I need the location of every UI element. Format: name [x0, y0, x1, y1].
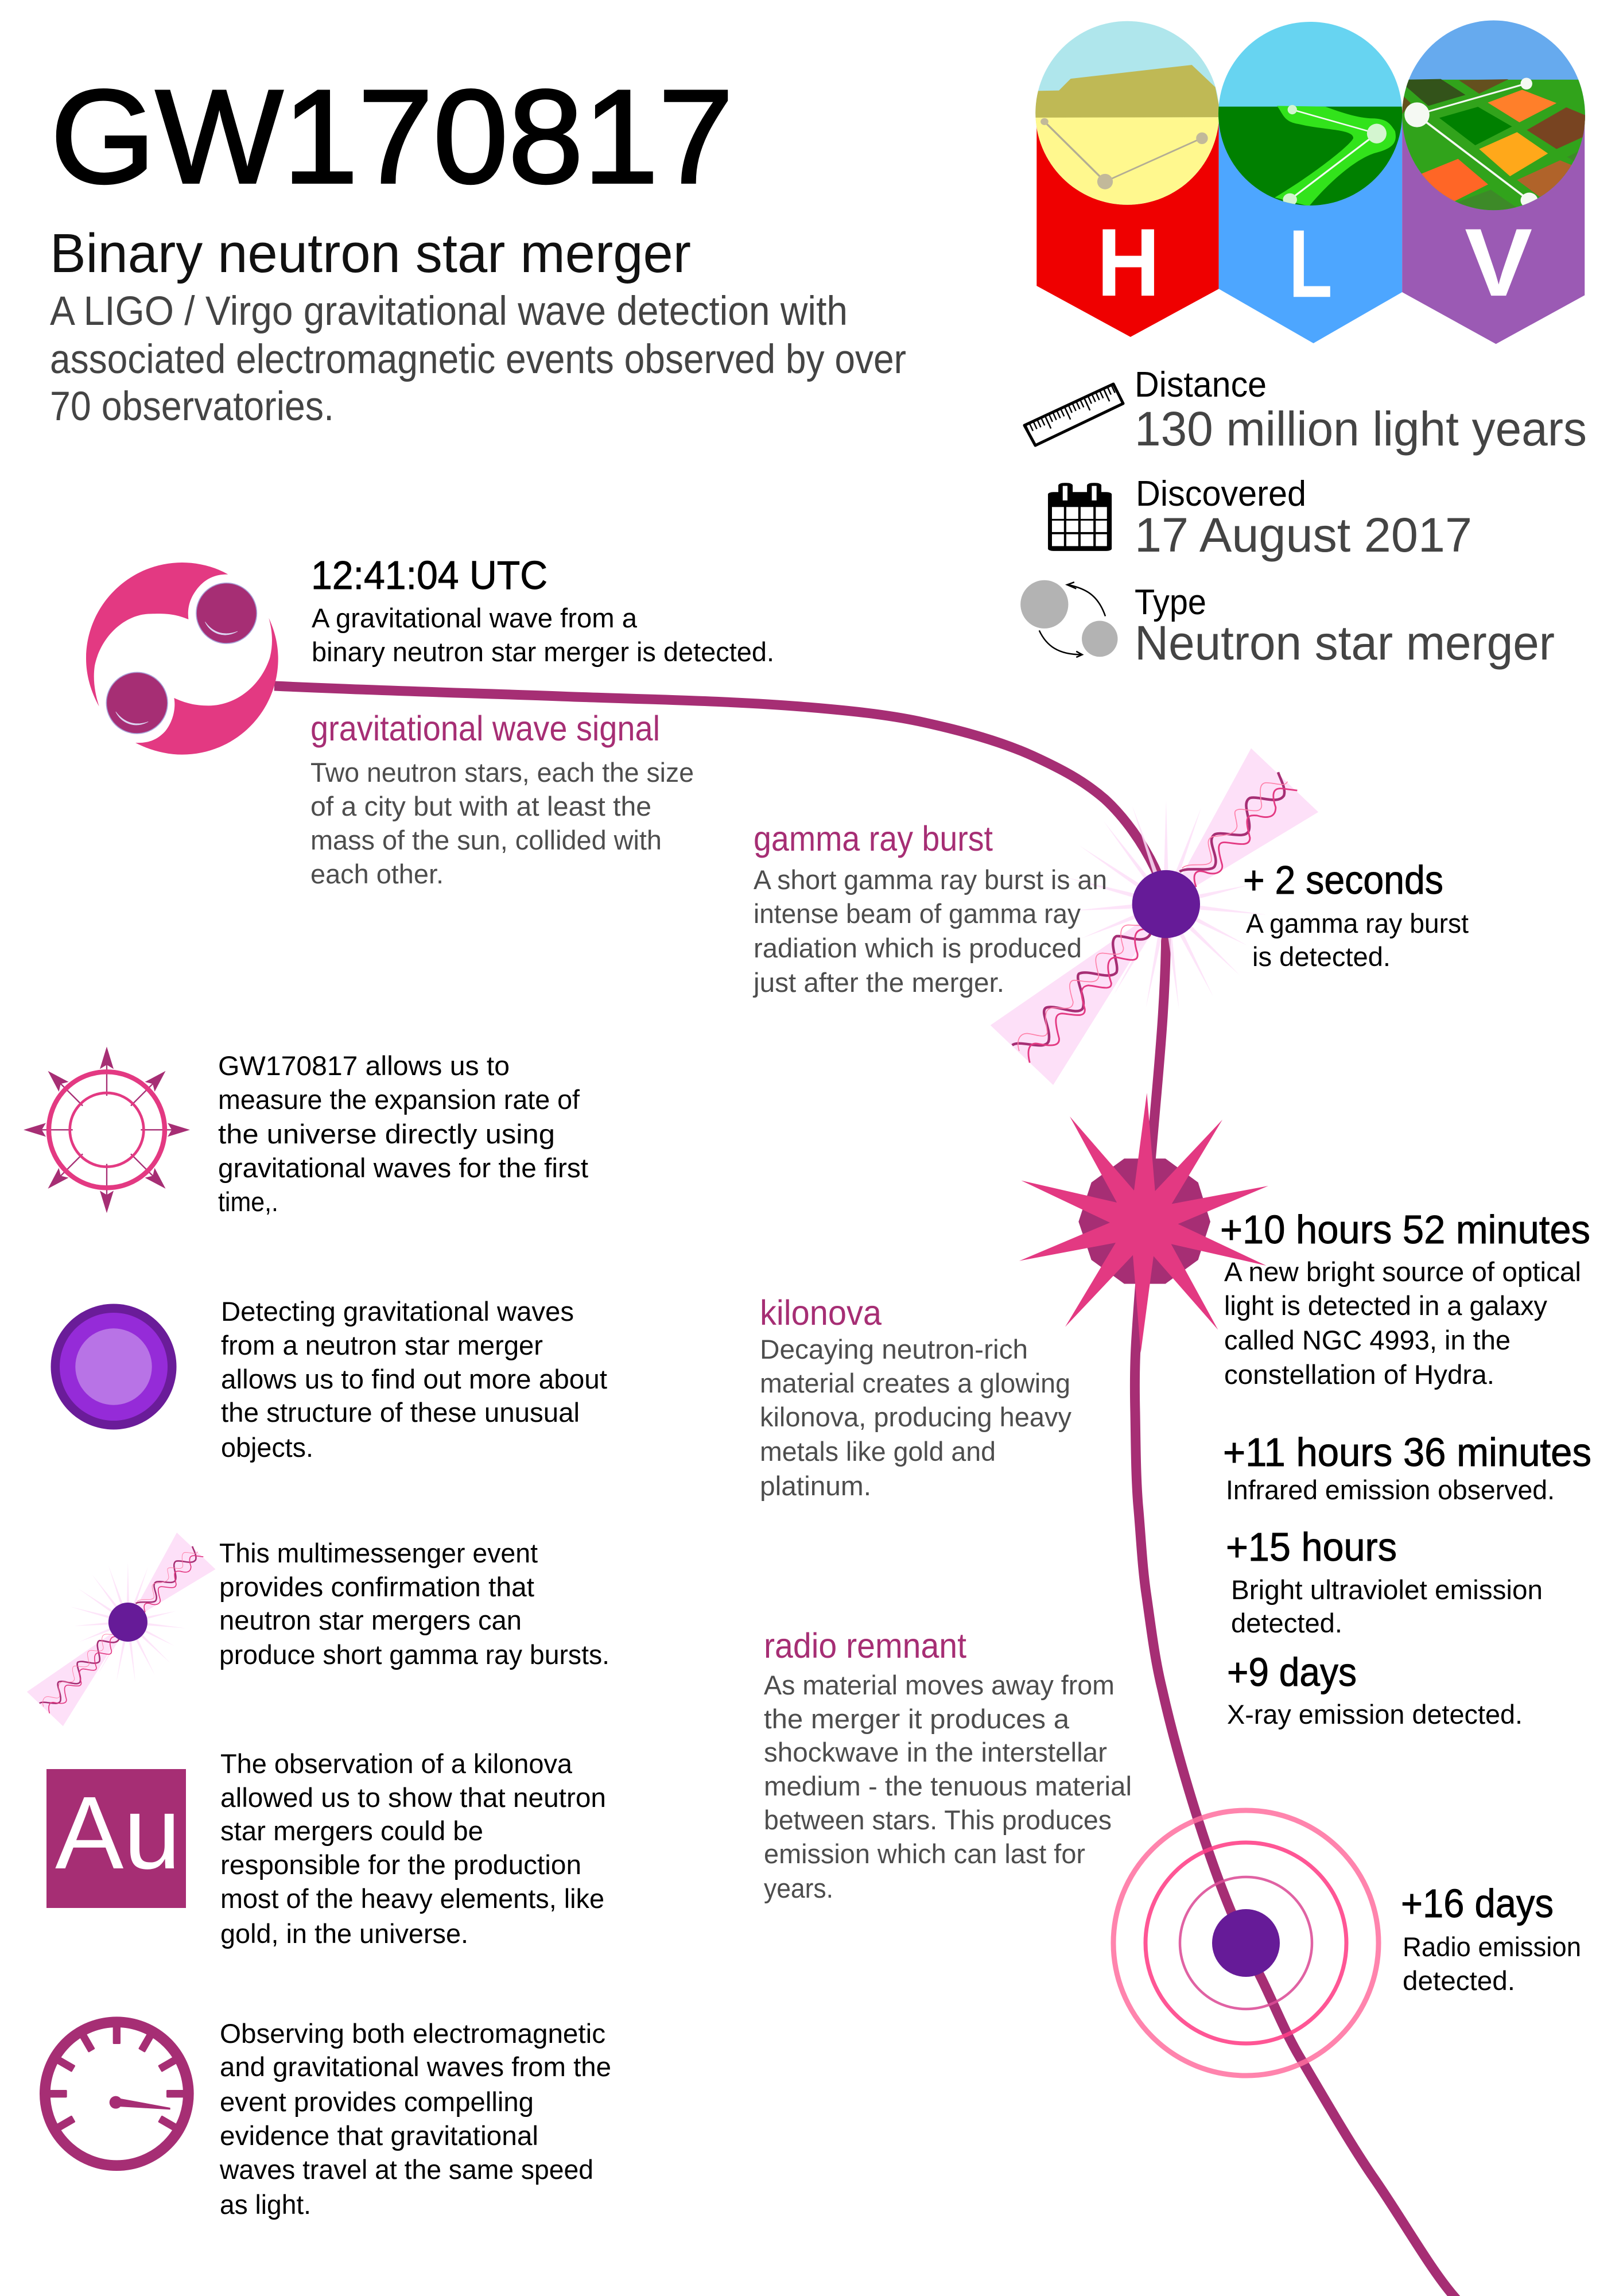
heavy elements text: gold, in the universe.: [220, 1918, 468, 1949]
expansion rate text: measure the expansion rate of: [218, 1084, 580, 1115]
kilonova explanation: [760, 1293, 1071, 1501]
expansion rate text: the universe directly using: [218, 1119, 555, 1149]
+2 seconds text: is detected.: [1252, 941, 1391, 972]
+10 hours text: A new bright source of optical: [1224, 1256, 1581, 1287]
radio remnant explanation: emission which can last for: [764, 1839, 1085, 1869]
kilonova explanation: material creates a glowing: [760, 1368, 1070, 1398]
speed of gravity text: evidence that gravitational: [220, 2120, 538, 2151]
kilonova explanation: Decaying neutron-rich: [760, 1334, 1028, 1364]
distance text: [1135, 365, 1587, 456]
multimessenger text: produce short gamma ray bursts.: [219, 1639, 609, 1670]
+9 days text: X-ray emission detected.: [1227, 1699, 1523, 1729]
speed of gravity text: [219, 2018, 611, 2220]
multimessenger text: provides confirmation that: [219, 1572, 534, 1602]
+11 hours text: +11 hours 36 minutes: [1223, 1430, 1591, 1475]
badge: Virgo: [1401, 19, 1589, 344]
kilonova explanation: metals like gold and: [760, 1436, 996, 1467]
intro text: [50, 289, 906, 429]
icon: speedometer: [45, 2022, 188, 2166]
heavy elements text: allowed us to show that neutron: [220, 1782, 606, 1813]
gravitational wave signal explanation: [310, 709, 694, 889]
title: GW170817: [51, 63, 733, 211]
expansion rate text: gravitational waves for the first: [218, 1153, 588, 1183]
icon: orbiting stars: [1020, 580, 1118, 657]
gamma ray burst explanation: intense beam of gamma ray: [754, 898, 1081, 929]
+10 hours text: called NGC 4993, in the: [1224, 1325, 1511, 1355]
radio remnant explanation: years.: [764, 1873, 833, 1903]
heavy elements text: The observation of a kilonova: [220, 1748, 573, 1779]
gamma ray burst explanation: A short gamma ray burst is an: [754, 864, 1107, 895]
neutron star structure text: objects.: [221, 1432, 313, 1463]
badge: Hanford: [1034, 19, 1221, 337]
+15 hours text: detected.: [1231, 1608, 1342, 1638]
gamma ray burst explanation: just after the merger.: [752, 967, 1004, 998]
discovered text: 17 August 2017: [1135, 508, 1472, 562]
neutron star structure text: Detecting gravitational waves: [221, 1296, 574, 1327]
gamma ray burst explanation: radiation which is produced: [754, 933, 1082, 963]
discovered text: [1135, 474, 1472, 562]
intro text: A LIGO / Virgo gravitational wave detection with: [50, 289, 848, 334]
icon: gold element box: Au: [55, 1775, 181, 1891]
+9 days text: +9 days: [1227, 1650, 1357, 1694]
neutron star structure text: allows us to find out more about: [221, 1364, 607, 1394]
+10 hours text: light is detected in a galaxy: [1224, 1290, 1547, 1321]
+16 days text: detected.: [1403, 1965, 1515, 1996]
multimessenger text: neutron star mergers can: [219, 1605, 522, 1635]
type text: Neutron star merger: [1135, 616, 1555, 670]
speed of gravity text: waves travel at the same speed: [219, 2154, 593, 2185]
neutron star structure text: the structure of these unusual: [221, 1397, 580, 1428]
icon: radio remnant rings: [1113, 1810, 1379, 2076]
type text: Type: [1135, 583, 1206, 622]
neutron star structure text: [221, 1296, 607, 1463]
+9 days text: [1227, 1650, 1523, 1729]
kilonova explanation: kilonova: [760, 1293, 882, 1332]
gravitational wave signal explanation: gravitational wave signal: [310, 709, 660, 748]
radio remnant explanation: As material moves away from: [764, 1670, 1115, 1700]
icon: ruler: [1024, 384, 1123, 445]
speed of gravity text: Observing both electromagnetic: [220, 2018, 605, 2049]
gravitational wave signal explanation: of a city but with at least the: [310, 791, 651, 821]
speed of gravity text: event provides compelling: [220, 2086, 534, 2117]
gravitational wave signal explanation: mass of the sun, collided with: [310, 825, 662, 855]
+11 hours text: [1223, 1430, 1591, 1505]
speed of gravity text: as light.: [220, 2189, 311, 2220]
distance text: 130 million light years: [1135, 402, 1587, 456]
+2 seconds text: + 2 seconds: [1243, 858, 1443, 902]
radio remnant explanation: [764, 1626, 1132, 1903]
expansion rate text: GW170817 allows us to: [218, 1050, 510, 1081]
heavy elements text: most of the heavy elements, like: [220, 1883, 604, 1914]
gamma ray burst explanation: gamma ray burst: [754, 819, 993, 858]
+16 days text: [1401, 1881, 1581, 1996]
icon: expanding universe: [24, 1046, 190, 1213]
badge: Virgo: V: [1465, 208, 1532, 316]
expansion rate text: [218, 1050, 588, 1217]
heavy elements text: responsible for the production: [220, 1849, 581, 1880]
kilonova explanation: kilonova, producing heavy: [760, 1402, 1071, 1432]
gamma ray burst explanation: [752, 819, 1107, 998]
badge: Livingston: [1217, 19, 1405, 343]
badge: Hanford: H: [1097, 208, 1160, 316]
+2 seconds text: [1243, 858, 1469, 972]
multimessenger text: [219, 1538, 609, 1670]
icon: small gamma ray burst: [27, 1533, 215, 1726]
radio remnant explanation: between stars. This produces: [764, 1805, 1112, 1835]
+10 hours text: constellation of Hydra.: [1224, 1359, 1494, 1390]
badge: Livingston: L: [1289, 210, 1333, 317]
merger time text: [311, 553, 774, 667]
icon: neutron star structure: [51, 1304, 177, 1429]
speed of gravity text: and gravitational waves from the: [220, 2051, 611, 2082]
timeline curve: [274, 686, 1461, 2296]
merger time text: binary neutron star merger is detected.: [312, 637, 774, 667]
gravitational wave signal explanation: Two neutron stars, each the size: [310, 757, 694, 788]
+2 seconds text: A gamma ray burst: [1246, 908, 1469, 938]
subtitle: Binary neutron star merger: [50, 223, 691, 284]
multimessenger text: This multimessenger event: [219, 1538, 538, 1568]
neutron star structure text: from a neutron star merger: [221, 1330, 543, 1360]
type text: [1135, 583, 1555, 670]
icon: binary neutron star merger: [86, 563, 278, 755]
radio remnant explanation: shockwave in the interstellar: [764, 1737, 1107, 1767]
+16 days text: Radio emission: [1403, 1932, 1581, 1962]
radio remnant explanation: the merger it produces a: [764, 1704, 1070, 1734]
merger time text: 12:41:04 UTC: [311, 553, 548, 598]
+11 hours text: Infrared emission observed.: [1226, 1475, 1555, 1505]
+15 hours text: Bright ultraviolet emission: [1231, 1574, 1543, 1605]
radio remnant explanation: medium - the tenuous material: [764, 1771, 1132, 1801]
merger time text: A gravitational wave from a: [312, 603, 638, 633]
+16 days text: +16 days: [1401, 1881, 1554, 1926]
+15 hours text: [1226, 1525, 1543, 1638]
+15 hours text: +15 hours: [1226, 1525, 1397, 1569]
icon: gamma ray burst: [991, 748, 1318, 1085]
+10 hours text: [1220, 1207, 1590, 1390]
heavy elements text: star mergers could be: [220, 1816, 483, 1846]
kilonova explanation: platinum.: [760, 1471, 871, 1501]
discovered text: Discovered: [1136, 474, 1306, 514]
expansion rate text: time,.: [218, 1186, 278, 1217]
intro text: associated electromagnetic events observed by over: [50, 337, 906, 382]
icon: kilonova star: [1019, 1093, 1268, 1353]
icon: calendar: [1048, 483, 1112, 551]
gravitational wave signal explanation: each other.: [310, 859, 444, 889]
radio remnant explanation: radio remnant: [764, 1626, 966, 1665]
heavy elements text: [220, 1748, 606, 1949]
distance text: Distance: [1135, 365, 1267, 405]
+10 hours text: +10 hours 52 minutes: [1220, 1207, 1590, 1252]
HLV detector badges: [1034, 19, 1589, 344]
intro text: 70 observatories.: [50, 384, 334, 429]
